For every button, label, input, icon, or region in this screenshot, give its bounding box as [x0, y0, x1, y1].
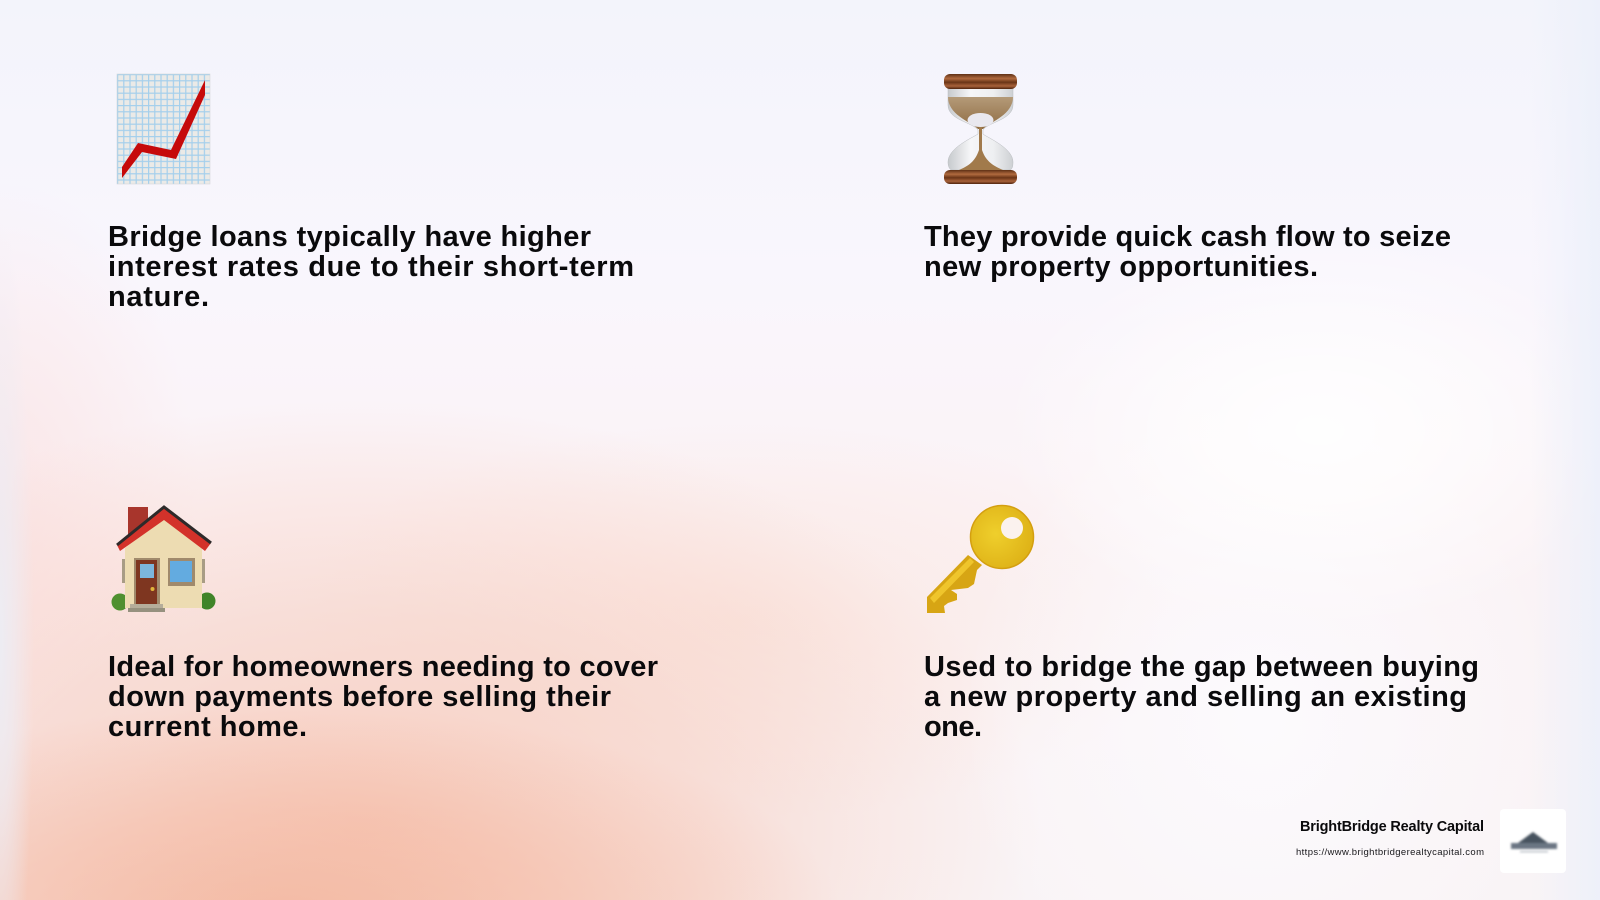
text: interest rates: interest rates due to their short-term: [108, 251, 634, 283]
text: bridge the gap: one.: [924, 711, 982, 743]
logo tile: [1500, 809, 1566, 873]
brand url: https://www.brightbridgerealtycapital.com: [1296, 847, 1484, 858]
footer brand: [1296, 809, 1566, 873]
text: interest rates: Bridge loans typically have higher: [108, 221, 591, 253]
icon: rising chart: [117, 74, 210, 184]
text: bridge the gap: Used to bridge the gap between buying: [924, 651, 1479, 683]
item 2: quick cash flow: [924, 74, 1451, 283]
text: quick cash flow: new property opportunities.: [924, 251, 1318, 283]
icon: key: [927, 506, 1034, 613]
text: interest rates: nature.: [108, 281, 209, 313]
item 4: bridge the gap: [924, 506, 1479, 743]
text: homeowners: down payments before selling their: [108, 681, 611, 713]
text: interest rates: [108, 221, 634, 313]
text: bridge the gap: a new property and selling an existing: [924, 681, 1467, 713]
icon: house: [112, 507, 216, 612]
item 1: higher interest rates: [108, 74, 634, 313]
text: quick cash flow: [924, 221, 1451, 283]
text: homeowners: Ideal for homeowners needing to cover: [108, 651, 658, 683]
brand name: BrightBridge Realty Capital: [1300, 819, 1484, 835]
text: homeowners: [108, 651, 658, 743]
text: homeowners: current home.: [108, 711, 307, 743]
item 3: homeowners: [108, 507, 658, 743]
icon: hourglass: [944, 74, 1017, 184]
text: quick cash flow: They provide quick cash flow to seize: [924, 221, 1451, 253]
text: bridge the gap: [924, 651, 1479, 743]
